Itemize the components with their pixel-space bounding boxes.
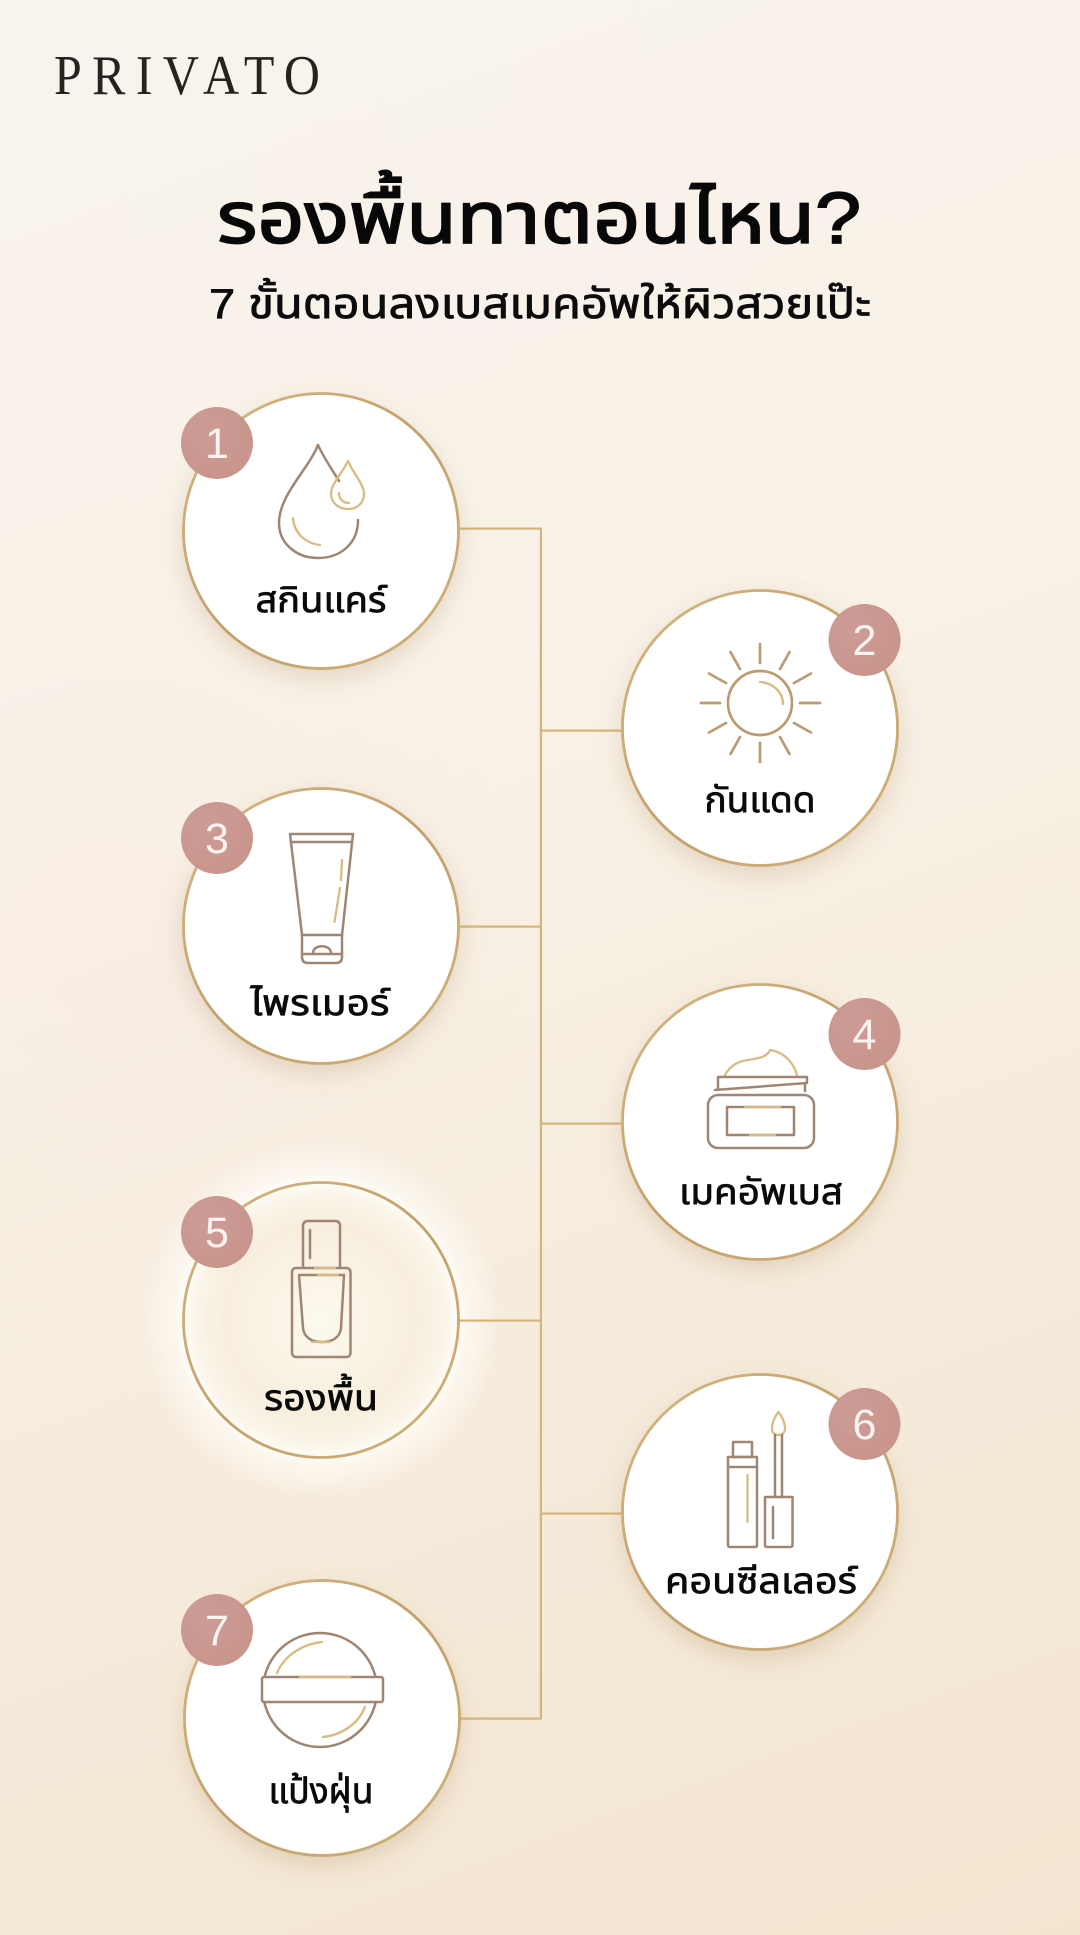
number badge 2: 2: [853, 617, 876, 665]
step 5: foundation highlighted: [181, 1182, 458, 1458]
icon: sun: [701, 644, 820, 762]
icon: concealer tube and wand: [728, 1412, 792, 1547]
number badge 2: [828, 604, 900, 676]
number badge 3: [181, 802, 253, 874]
icon: powder puff: [262, 1633, 383, 1747]
subtitle: 7 ขั้นตอนลงเบสเมคอัพให้ผิวสวยเป๊ะ: [209, 277, 871, 327]
step 7: powder: [181, 1580, 460, 1856]
icon: tube: [290, 834, 353, 963]
number badge 1: 1: [205, 420, 229, 468]
label: แป้งฝุ่น: [268, 1770, 374, 1812]
number badge 3: 3: [205, 815, 229, 863]
step 2: sunscreen: [622, 590, 900, 866]
step 1: skincare: [181, 394, 458, 668]
connector lines: [459, 528, 624, 1720]
number badge 7: [181, 1594, 253, 1666]
icon: water drops: [279, 445, 364, 558]
number badge 5: [181, 1196, 253, 1268]
logo: PRIVATO: PRIVATO: [54, 43, 320, 107]
label: กันแดด: [704, 779, 816, 820]
label: รองพื้น: [264, 1373, 378, 1418]
number badge 1: [181, 407, 253, 479]
icon: cream jar: [708, 1050, 814, 1148]
label: ไพรเมอร์: [249, 982, 391, 1023]
number badge 7: 7: [205, 1607, 229, 1655]
glow behind foundation step: [141, 1140, 501, 1500]
label: คอนซีลเลอร์: [665, 1560, 859, 1601]
label: สกินแคร์: [256, 579, 388, 620]
number badge 4: 4: [853, 1011, 876, 1059]
step 3: primer: [181, 788, 458, 1064]
number badge 4: [828, 998, 900, 1070]
number badge 6: 6: [853, 1401, 876, 1449]
background tint: [0, 540, 540, 1380]
number badge 6: [828, 1388, 900, 1460]
icon: foundation bottle: [292, 1221, 350, 1357]
step 6: concealer: [622, 1374, 900, 1650]
number badge 5: 5: [205, 1209, 229, 1257]
title: รองพื้นทาตอนไหน?: [217, 170, 861, 259]
step 4: makeup base: [622, 984, 900, 1260]
label: เมคอัพเบส: [679, 1171, 843, 1212]
